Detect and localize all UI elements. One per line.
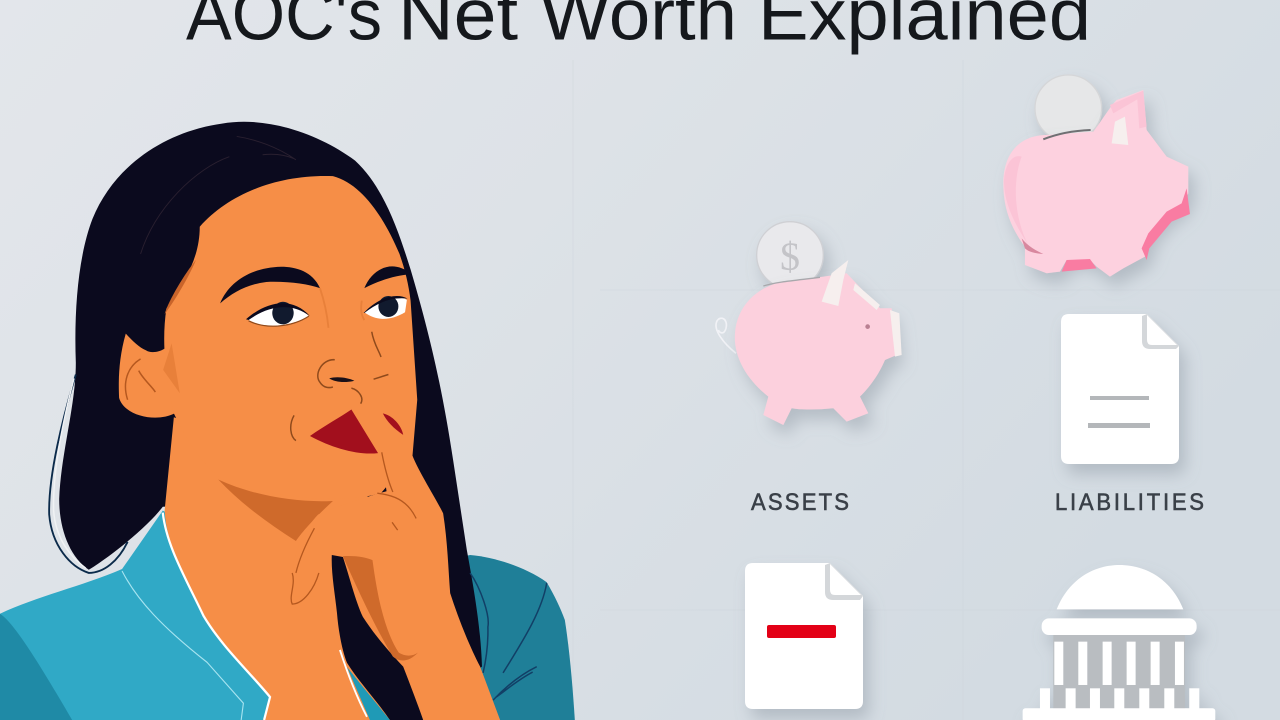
icon: piggy bank large xyxy=(1003,75,1190,277)
lips xyxy=(310,410,378,454)
body rim xyxy=(1004,156,1028,245)
ear xyxy=(1112,117,1128,145)
title xyxy=(186,0,1091,56)
label: liabilities: LIABILITIES xyxy=(1055,488,1204,515)
hair xyxy=(59,122,482,694)
face xyxy=(164,176,417,499)
jacket right shoulder xyxy=(370,555,575,720)
snout xyxy=(890,310,902,357)
label: assets: ASSETS xyxy=(751,488,849,515)
hot-pink edges xyxy=(1142,188,1190,260)
icon: document with red bar xyxy=(745,563,863,709)
coin xyxy=(757,222,823,288)
neck xyxy=(165,417,392,720)
pig body xyxy=(1003,90,1188,277)
illustration: thinking woman xyxy=(0,122,575,720)
ear xyxy=(119,334,185,418)
nose xyxy=(291,332,388,441)
eye xyxy=(865,324,870,329)
temple shading xyxy=(165,260,196,314)
inner teal gap xyxy=(347,667,390,720)
hair outline strands xyxy=(49,375,128,573)
icon: capitol building xyxy=(1023,565,1215,720)
hand and arm xyxy=(292,452,500,720)
pig body xyxy=(735,273,897,425)
coin xyxy=(1035,75,1102,142)
jacket left side xyxy=(0,511,392,720)
neck shadow xyxy=(218,480,333,541)
tail xyxy=(716,318,736,353)
ear xyxy=(822,260,848,306)
coin: $ xyxy=(780,234,800,279)
jacket lapel lines xyxy=(163,513,270,720)
eyebrows xyxy=(220,267,320,303)
eyes xyxy=(249,305,309,326)
coin slot xyxy=(1043,130,1091,139)
hair between hand and neck xyxy=(332,555,423,720)
finger and knuckle lines xyxy=(291,452,416,604)
icon: piggy bank with dollar coin xyxy=(716,222,902,425)
icon: document with lines xyxy=(1061,314,1179,464)
left sleeve shading xyxy=(0,614,72,720)
sleeve shading on hand xyxy=(343,556,418,661)
